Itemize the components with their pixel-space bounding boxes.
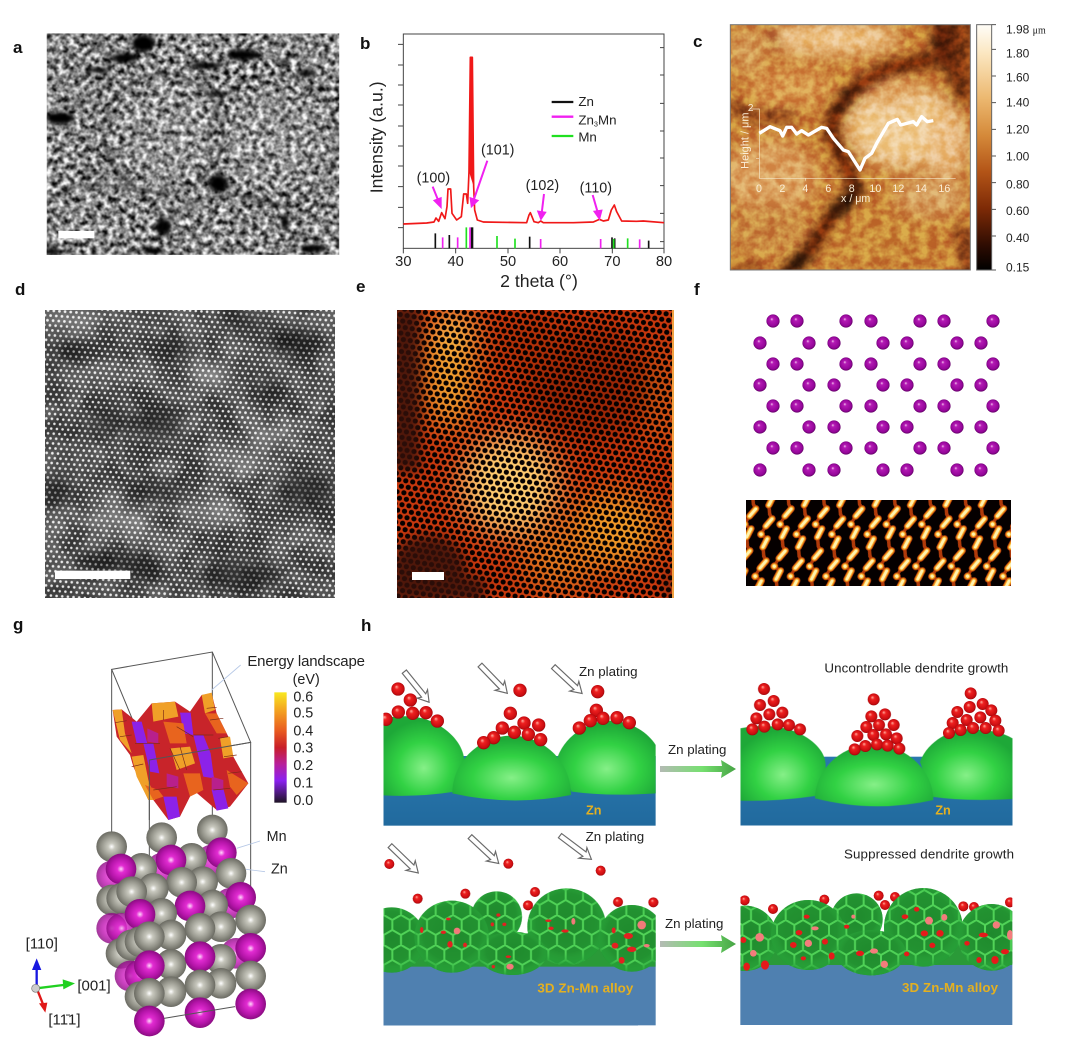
height profile inset: 2 xyxy=(748,103,754,114)
colour scale for energy: 0.5 xyxy=(293,705,313,721)
red Zn balls xyxy=(379,682,636,749)
red diffraction curve xyxy=(403,57,664,224)
process arrow, bottom row: Zn plating xyxy=(665,916,723,931)
hollow plating arrows xyxy=(399,660,587,706)
colour scale for energy: 0.0 xyxy=(293,793,313,809)
scale bar xyxy=(412,572,444,580)
height profile inset: 6 xyxy=(825,183,831,195)
panel label a: a xyxy=(13,38,23,57)
height profile inset xyxy=(740,103,956,205)
panel h, bottom left: plating on 3D foam alloy xyxy=(384,832,658,1026)
label: energy landscape: (eV) xyxy=(293,672,320,688)
back cell edges xyxy=(112,652,251,923)
hollow plating arrows xyxy=(385,830,595,878)
legend: Mn xyxy=(578,130,597,145)
process arrow, top row xyxy=(660,742,736,778)
process arrow, bottom row xyxy=(660,916,736,953)
x axis labels: 50 xyxy=(500,254,516,270)
peak labels and magenta arrows xyxy=(417,142,612,219)
peak labels and magenta arrows: (101) xyxy=(481,142,514,158)
x axis labels: 30 xyxy=(395,254,411,270)
energy landscape surface xyxy=(113,693,248,820)
panel label e: e xyxy=(356,277,365,296)
panel b: XRD pattern xyxy=(367,34,672,291)
process arrow, top row: Zn plating xyxy=(668,742,726,757)
AFM image border xyxy=(730,25,970,270)
x axis labels: 70 xyxy=(604,254,620,270)
front cell edges over the surface xyxy=(149,742,251,820)
plot frame and ticks xyxy=(398,34,664,253)
colour bar: 0.60 xyxy=(1006,204,1030,218)
panel label d: d xyxy=(15,280,25,299)
Zn plating label: Zn plating xyxy=(579,664,638,679)
panel label f: f xyxy=(694,280,700,299)
alloy label: 3D Zn-Mn alloy xyxy=(902,980,999,995)
panel f: simulated lattice strip xyxy=(746,500,1011,586)
legend: 3 xyxy=(594,120,598,129)
height profile inset: x / μm xyxy=(841,193,870,205)
red deposits inside pores xyxy=(740,907,1009,971)
panel label b: b xyxy=(360,34,370,53)
panel h, top right: uncontrollable dendrite growth xyxy=(740,661,1012,826)
panel f: atomic model of purple atoms xyxy=(753,314,1000,477)
Zn substrate label: Zn xyxy=(935,804,951,818)
x axis labels: 40 xyxy=(448,254,464,270)
height profile inset: 8 xyxy=(849,183,855,195)
label: Zn: Zn xyxy=(271,861,288,877)
height profile inset: 4 xyxy=(802,183,808,195)
colour bar: 0.15 xyxy=(1006,260,1030,274)
colour scale for energy: 0.4 xyxy=(293,723,313,739)
colour scale for energy: 0.6 xyxy=(293,690,313,706)
alloy label: 3D Zn-Mn alloy xyxy=(537,980,634,995)
panel d: atomic-resolution gray micrograph xyxy=(42,310,337,598)
label: Mn: Mn xyxy=(267,829,287,845)
panel label g: g xyxy=(13,615,23,634)
panel label h: h xyxy=(361,616,371,635)
legend: Mn xyxy=(598,112,616,127)
x axis labels: 60 xyxy=(552,254,568,270)
y axis title: Intensity (a.u.) xyxy=(367,81,387,193)
height profile inset: 16 xyxy=(938,183,950,195)
scale bar xyxy=(55,571,130,579)
panel h, bottom right: suppressed dendrite growth xyxy=(740,849,1014,1025)
peak labels and magenta arrows: (110) xyxy=(580,181,612,197)
scale bar xyxy=(58,231,94,238)
legend: Zn xyxy=(578,94,594,109)
crystal axes: [110] xyxy=(26,935,58,952)
colour scale for energy: 0.2 xyxy=(293,758,313,774)
crystal axes xyxy=(26,935,111,1029)
colour bar xyxy=(977,22,1046,274)
porous green spheres xyxy=(384,888,656,975)
crystal axes: [001] xyxy=(77,978,111,995)
colour scale for energy xyxy=(274,690,313,809)
crystal axes: [11̄1] xyxy=(48,1012,81,1029)
label: energy landscape xyxy=(212,653,365,690)
x axis title: 2 theta (°) xyxy=(500,271,578,291)
label: Zn xyxy=(246,861,288,877)
panel a: SEM micrograph xyxy=(46,33,340,255)
colour bar: 1.80 xyxy=(1006,46,1030,60)
reference sticks xyxy=(435,227,649,248)
red Zn balls behind spheres xyxy=(740,891,1015,914)
red deposits inside pores xyxy=(420,913,636,968)
caption: Suppressed dendrite growth xyxy=(844,846,1014,861)
colour bar: 1.20 xyxy=(1006,123,1030,137)
label: Mn xyxy=(237,829,287,848)
peak labels and magenta arrows: (102) xyxy=(526,178,559,194)
panel c: AFM height map xyxy=(723,20,1046,274)
x axis labels xyxy=(395,254,672,270)
red Zn balls xyxy=(384,859,658,910)
height profile inset: 14 xyxy=(915,183,927,195)
height profile inset: Height / μm xyxy=(740,112,752,169)
height profile inset: 2 xyxy=(779,183,785,195)
legend: Zn xyxy=(578,112,594,127)
colour scale for energy: 0.1 xyxy=(293,776,313,792)
colour bar: 1.60 xyxy=(1006,70,1030,84)
caption: Uncontrollable dendrite growth xyxy=(824,661,1008,676)
green domes xyxy=(383,716,656,800)
colour bar: 1.00 xyxy=(1006,149,1030,163)
colour bar: 1.98 μm xyxy=(1006,22,1046,36)
label: energy landscape: Energy landscape xyxy=(247,653,365,670)
peak labels and magenta arrows: (100) xyxy=(417,170,450,186)
panel e: false-colour lattice map xyxy=(390,306,674,602)
panel g: crystal model with energy landscape xyxy=(26,652,365,1036)
height profile inset: 12 xyxy=(892,183,904,195)
atoms: grey Zn and magenta Mn spheres xyxy=(96,815,266,1036)
Zn plating label: Zn plating xyxy=(586,829,644,844)
Zn substrate label: Zn xyxy=(586,804,601,818)
height profile inset: 0 xyxy=(756,183,762,195)
colour bar: 0.80 xyxy=(1006,178,1030,192)
colour bar: 1.40 xyxy=(1006,95,1030,109)
panel label c: c xyxy=(693,32,702,51)
porous green spheres xyxy=(740,888,1012,976)
panel h, top left: Zn plating on bare dome substrate xyxy=(379,660,656,826)
x axis labels: 80 xyxy=(656,254,672,270)
legend xyxy=(552,94,616,145)
colour bar: 0.40 xyxy=(1006,231,1030,245)
colour scale for energy: 0.3 xyxy=(293,740,313,756)
height profile inset: 10 xyxy=(869,183,881,195)
